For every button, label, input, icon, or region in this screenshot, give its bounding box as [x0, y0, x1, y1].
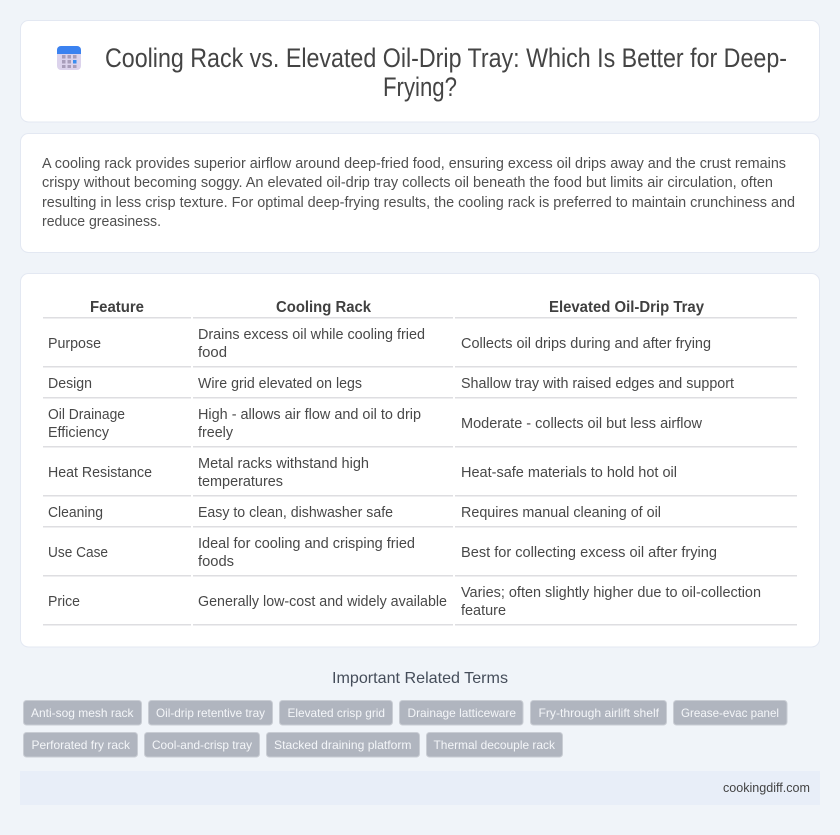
panel: summary paragraph: A cooling rack provides superior airflow around deep-fried food, ensuring excess oil drips away and the crust remains: [42, 156, 786, 172]
tag: Anti-sog mesh rack: [31, 706, 134, 720]
table row: Oil Drainage Efficiency: freely: [198, 425, 234, 441]
table row: Heat Resistance: temperatures: [198, 474, 283, 490]
table row: Price: Varies; often slightly higher due to oil-collection: [461, 585, 761, 601]
table row: Use Case: Ideal for cooling and crisping fried: [198, 536, 415, 552]
table row: Cleaning: Easy to clean, dishwasher safe: [198, 505, 393, 521]
table header: Elevated Oil-Drip Tray: [549, 299, 704, 316]
table row: Purpose: food: [198, 345, 227, 361]
title: [105, 43, 787, 102]
table row: Oil Drainage Efficiency: Oil Drainage: [48, 407, 125, 423]
table row: Cleaning: [48, 505, 661, 521]
tag: Oil-drip retentive tray: [156, 706, 265, 720]
table header: Cooling Rack: [276, 299, 371, 316]
tag: Perforated fry rack: [32, 738, 131, 752]
table row: Oil Drainage Efficiency: Moderate - collects oil but less airflow: [461, 416, 703, 432]
tag: [266, 732, 420, 757]
tag: Elevated crisp grid: [288, 706, 385, 720]
table row: Purpose: Drains excess oil while cooling fried: [198, 327, 425, 343]
panel: summary paragraph: [20, 134, 820, 252]
panel: title card: [20, 20, 820, 122]
panel: summary paragraph: reduce greasiness.: [42, 214, 161, 230]
tag: [24, 732, 138, 757]
related term tags: [24, 700, 787, 757]
table row: Cleaning: Requires manual cleaning of oil: [461, 505, 661, 521]
tag: Grease-evac panel: [681, 706, 779, 720]
table row: Use Case: Best for collecting excess oil after frying: [461, 545, 717, 561]
tag: Cool-and-crisp tray: [152, 738, 252, 752]
tag: [24, 700, 142, 725]
table row: Price: [48, 585, 761, 619]
tag: Fry-through airlift shelf: [538, 706, 660, 720]
icon: calendar: [57, 46, 81, 70]
table row: Purpose: Collects oil drips during and after frying: [461, 336, 711, 352]
table row: Heat Resistance: [48, 456, 677, 490]
tag: [280, 700, 392, 725]
table header: Feature: [90, 299, 144, 316]
table row: Use Case: [48, 536, 717, 570]
heading: important related terms: Important Related Terms: [332, 670, 508, 687]
table row: Heat Resistance: Metal racks withstand high: [198, 456, 369, 472]
tag: [148, 700, 272, 725]
table row: Price: Generally low-cost and widely available: [198, 594, 447, 610]
table row: Design: Design: [48, 376, 92, 392]
table row: Purpose: Purpose: [48, 336, 101, 352]
tag: [530, 700, 666, 725]
table row: Price: Price: [48, 594, 80, 610]
panel: summary paragraph: crispy without becoming soggy. An elevated oil-drip tray collects oil beneath the food but limits air circulation, often: [42, 175, 773, 191]
panel: summary paragraph: resulting in less crisp texture. For optimal deep-frying results, the cooling rack is preferred to maintain crunchiness and: [42, 195, 795, 211]
tag: [426, 732, 562, 757]
table row: Heat Resistance: Heat-safe materials to hold hot oil: [461, 465, 677, 481]
table row: Price: feature: [461, 603, 506, 619]
table row: Use Case: Use Case: [48, 545, 108, 561]
table row: Cleaning: Cleaning: [48, 505, 103, 521]
tag: Drainage latticeware: [408, 706, 516, 720]
tag: [144, 732, 260, 757]
tag: Stacked draining platform: [274, 738, 412, 752]
table row: Oil Drainage Efficiency: [48, 407, 703, 441]
table row: Oil Drainage Efficiency: High - allows air flow and oil to drip: [198, 407, 421, 423]
tag: [674, 700, 787, 725]
footer: cookingdiff.com: [723, 780, 810, 795]
table row: Oil Drainage Efficiency: Efficiency: [48, 425, 110, 441]
tag: Thermal decouple rack: [434, 738, 556, 752]
panel: comparison table: [20, 274, 820, 647]
table row: Heat Resistance: Heat Resistance: [48, 465, 152, 481]
table row: Design: [48, 376, 734, 392]
table row: Use Case: foods: [198, 554, 234, 570]
table row: Design: Wire grid elevated on legs: [198, 376, 362, 392]
tag: [400, 700, 523, 725]
table header: [90, 299, 704, 316]
table row: Purpose: [48, 327, 711, 361]
table row: Design: Shallow tray with raised edges and support: [461, 376, 734, 392]
title: Frying?: [383, 72, 457, 102]
footer: [20, 771, 820, 805]
